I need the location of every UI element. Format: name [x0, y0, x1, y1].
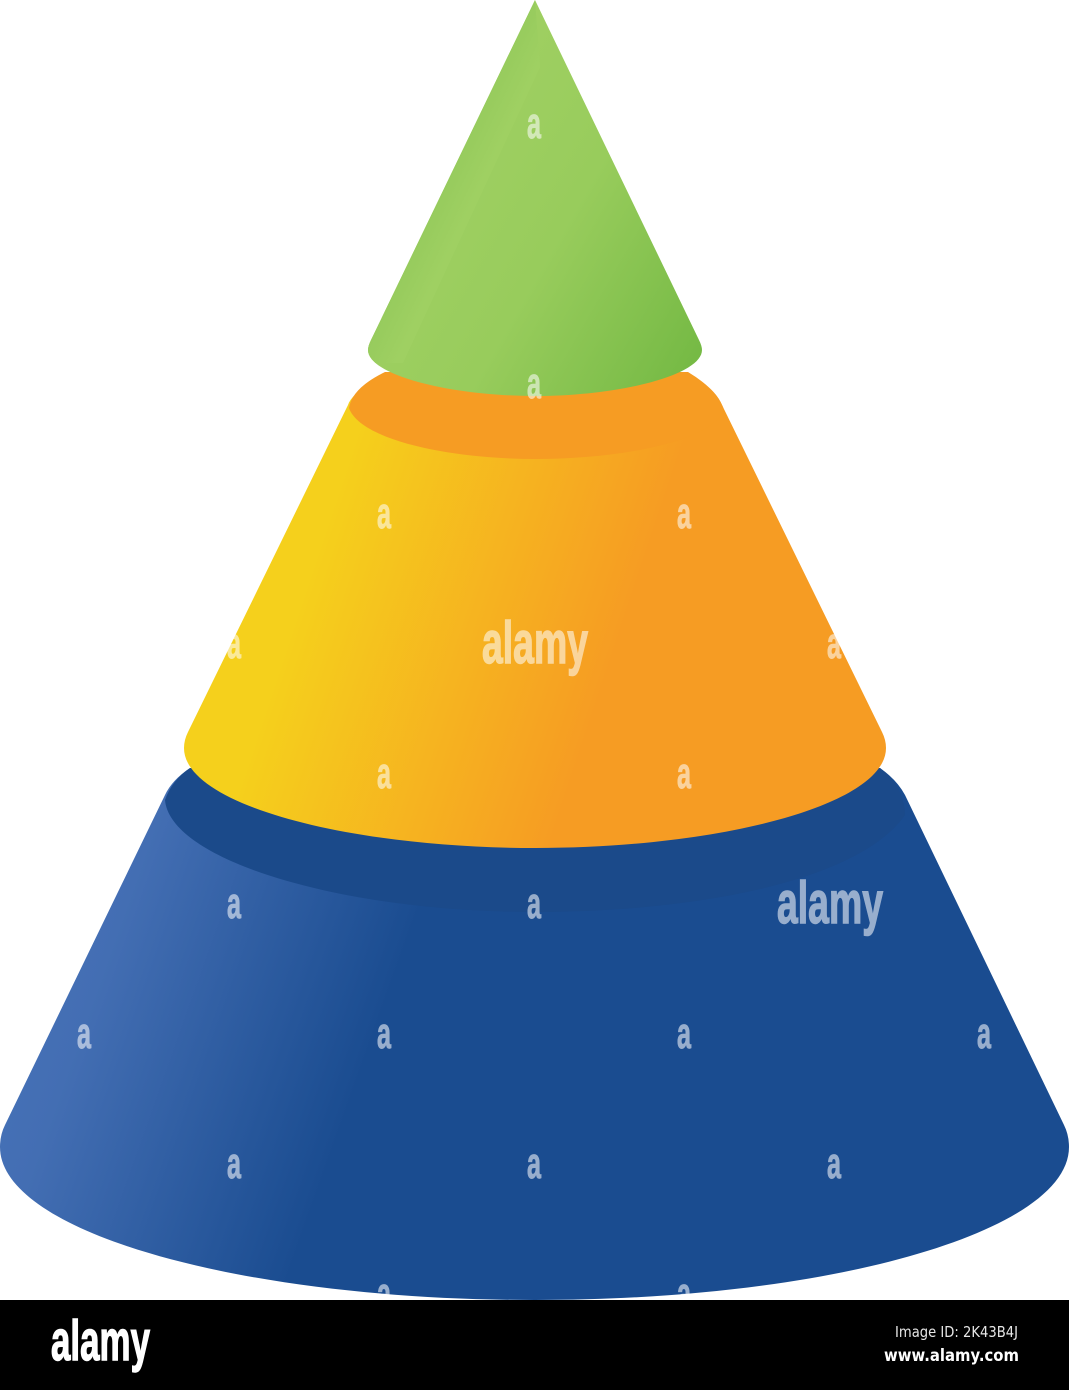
- watermark: stock logo marks: a: [527, 1139, 541, 1188]
- watermark: stock logo marks: a: [977, 1009, 991, 1058]
- watermark: stock logo marks: a: [677, 1009, 691, 1058]
- image id: Image ID: 2K43B4J: [895, 1323, 1018, 1341]
- watermark: stock logo marks: a: [377, 489, 391, 538]
- pyramid tier: orange middle: [184, 372, 886, 848]
- watermark: stock logo marks: a: [677, 1269, 691, 1318]
- watermark: stock logo marks: a: [527, 359, 541, 408]
- watermark: stock logo marks: a: [227, 879, 241, 928]
- watermark: stock logo marks: a: [77, 1009, 91, 1058]
- watermark: stock logo marks: a: [377, 749, 391, 798]
- watermark: stock logo marks: a: [227, 619, 241, 668]
- pyramid tier: green top cone: [360, 0, 710, 400]
- watermark: stock logo marks: a: [377, 1009, 391, 1058]
- watermark: stock logo marks: [77, 99, 991, 1318]
- watermark: stock logo marks: alamy: [482, 610, 588, 676]
- footer bar: [0, 1300, 1069, 1390]
- watermark: stock logo marks: a: [827, 1139, 841, 1188]
- watermark: stock logo marks: a: [377, 1269, 391, 1318]
- footer logo: alamy: [51, 1309, 150, 1373]
- watermark: stock logo marks: a: [827, 619, 841, 668]
- watermark: stock logo marks: a: [527, 879, 541, 928]
- watermark: stock logo marks: a: [677, 489, 691, 538]
- watermark: stock logo marks: alamy: [777, 870, 883, 936]
- watermark: stock logo marks: a: [227, 1139, 241, 1188]
- watermark: stock logo marks: a: [527, 99, 541, 148]
- site url: www.alamy.com: [884, 1346, 1019, 1366]
- watermark: stock logo marks: a: [677, 749, 691, 798]
- pyramid tier: blue base: [0, 768, 1069, 1300]
